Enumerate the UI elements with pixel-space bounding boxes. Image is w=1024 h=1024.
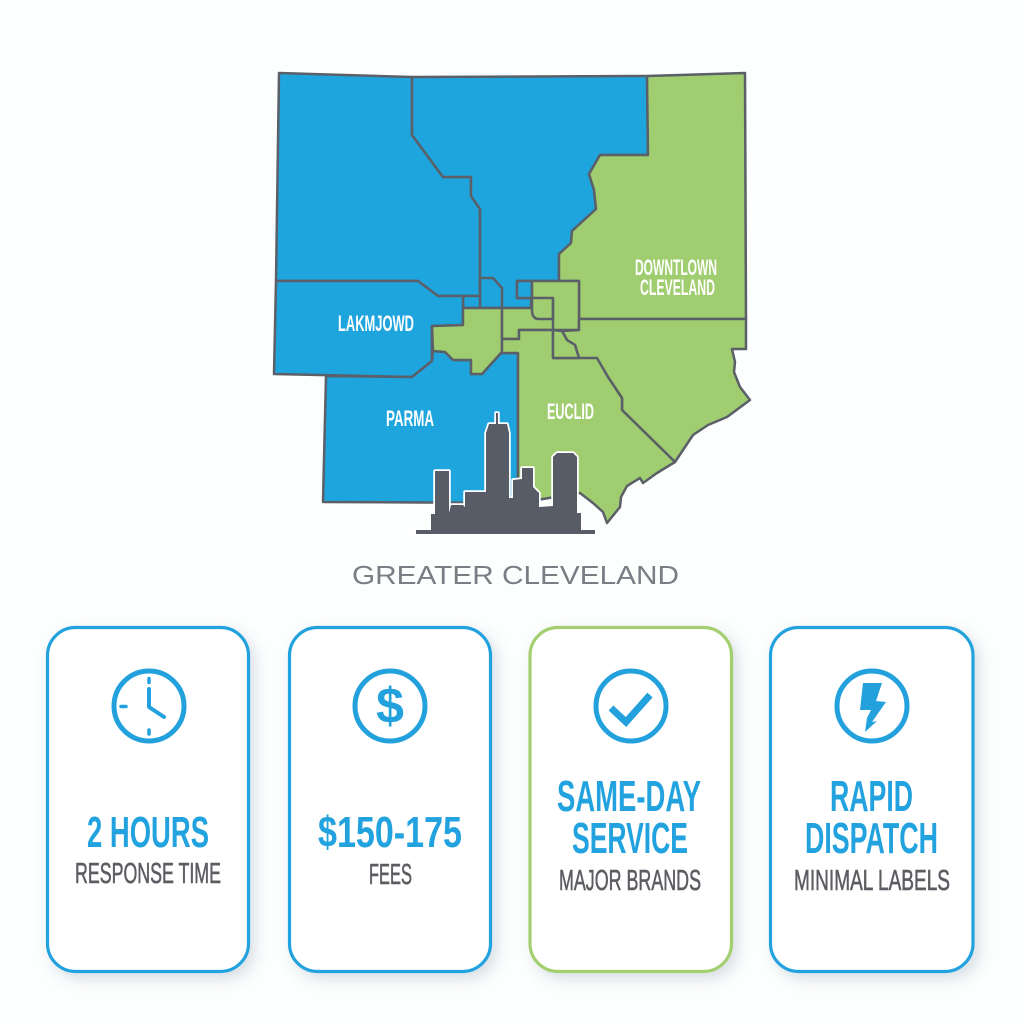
divider: vertical line inside central block bbox=[552, 298, 554, 330]
panel: same-day service bbox=[530, 628, 732, 972]
stat caption: FEES bbox=[369, 859, 412, 891]
label line 2: CLEVELAND bbox=[640, 275, 715, 300]
region: inner green block bbox=[532, 298, 553, 319]
card frame bbox=[530, 628, 732, 972]
panel: rapid dispatch bbox=[770, 628, 973, 972]
label: Lakewood: LAKMJOWD bbox=[338, 311, 414, 336]
label: Parma: PARMA bbox=[386, 406, 434, 431]
stat value bbox=[805, 772, 938, 863]
icon: check mark bbox=[596, 671, 666, 741]
region: small wedge bbox=[553, 330, 579, 358]
region: northwest county bbox=[276, 73, 480, 296]
stat value bbox=[557, 772, 701, 863]
stat value: $150-175 bbox=[318, 808, 462, 857]
label: Downtown Cleveland bbox=[635, 255, 717, 300]
stat caption: RESPONSE TIME bbox=[75, 858, 221, 890]
value line 1: SAME-DAY bbox=[557, 772, 701, 821]
region: small central blue district bbox=[480, 278, 502, 308]
map: Greater Cleveland service area bbox=[274, 73, 750, 534]
card frame bbox=[48, 628, 248, 972]
icon: dollar coin bbox=[355, 671, 425, 741]
region: north county bbox=[412, 76, 648, 308]
region: Parma bbox=[323, 351, 518, 503]
icon: dollar coin: $ bbox=[376, 678, 404, 734]
value line 1: RAPID bbox=[830, 772, 913, 821]
heading: Greater Cleveland: GREATER CLEVELAND bbox=[352, 560, 679, 590]
stat value: 2 HOURS bbox=[87, 808, 209, 857]
value line 2: SERVICE bbox=[572, 814, 688, 863]
stat caption: MAJOR BRANDS bbox=[559, 865, 701, 897]
region: southeast green county bbox=[562, 319, 750, 462]
label line 1: DOWNTLOWN bbox=[635, 255, 717, 280]
region: small blue square bbox=[517, 281, 532, 298]
region: west central green district bbox=[432, 308, 502, 374]
icon: city skyline bbox=[416, 413, 595, 534]
card frame bbox=[290, 628, 490, 972]
card frame bbox=[770, 628, 973, 972]
value line 2: DISPATCH bbox=[805, 814, 938, 863]
region: central green district bbox=[502, 281, 579, 339]
region: Euclid bbox=[502, 330, 675, 523]
icon: lightning bolt bbox=[837, 671, 907, 741]
region: northeast green county bbox=[559, 73, 746, 319]
panel: fees bbox=[290, 628, 490, 972]
panel: response time bbox=[48, 628, 248, 972]
icon: clock bbox=[114, 671, 184, 741]
label: Euclid: EUCLID bbox=[547, 399, 594, 424]
region: Lakewood bbox=[274, 281, 463, 377]
